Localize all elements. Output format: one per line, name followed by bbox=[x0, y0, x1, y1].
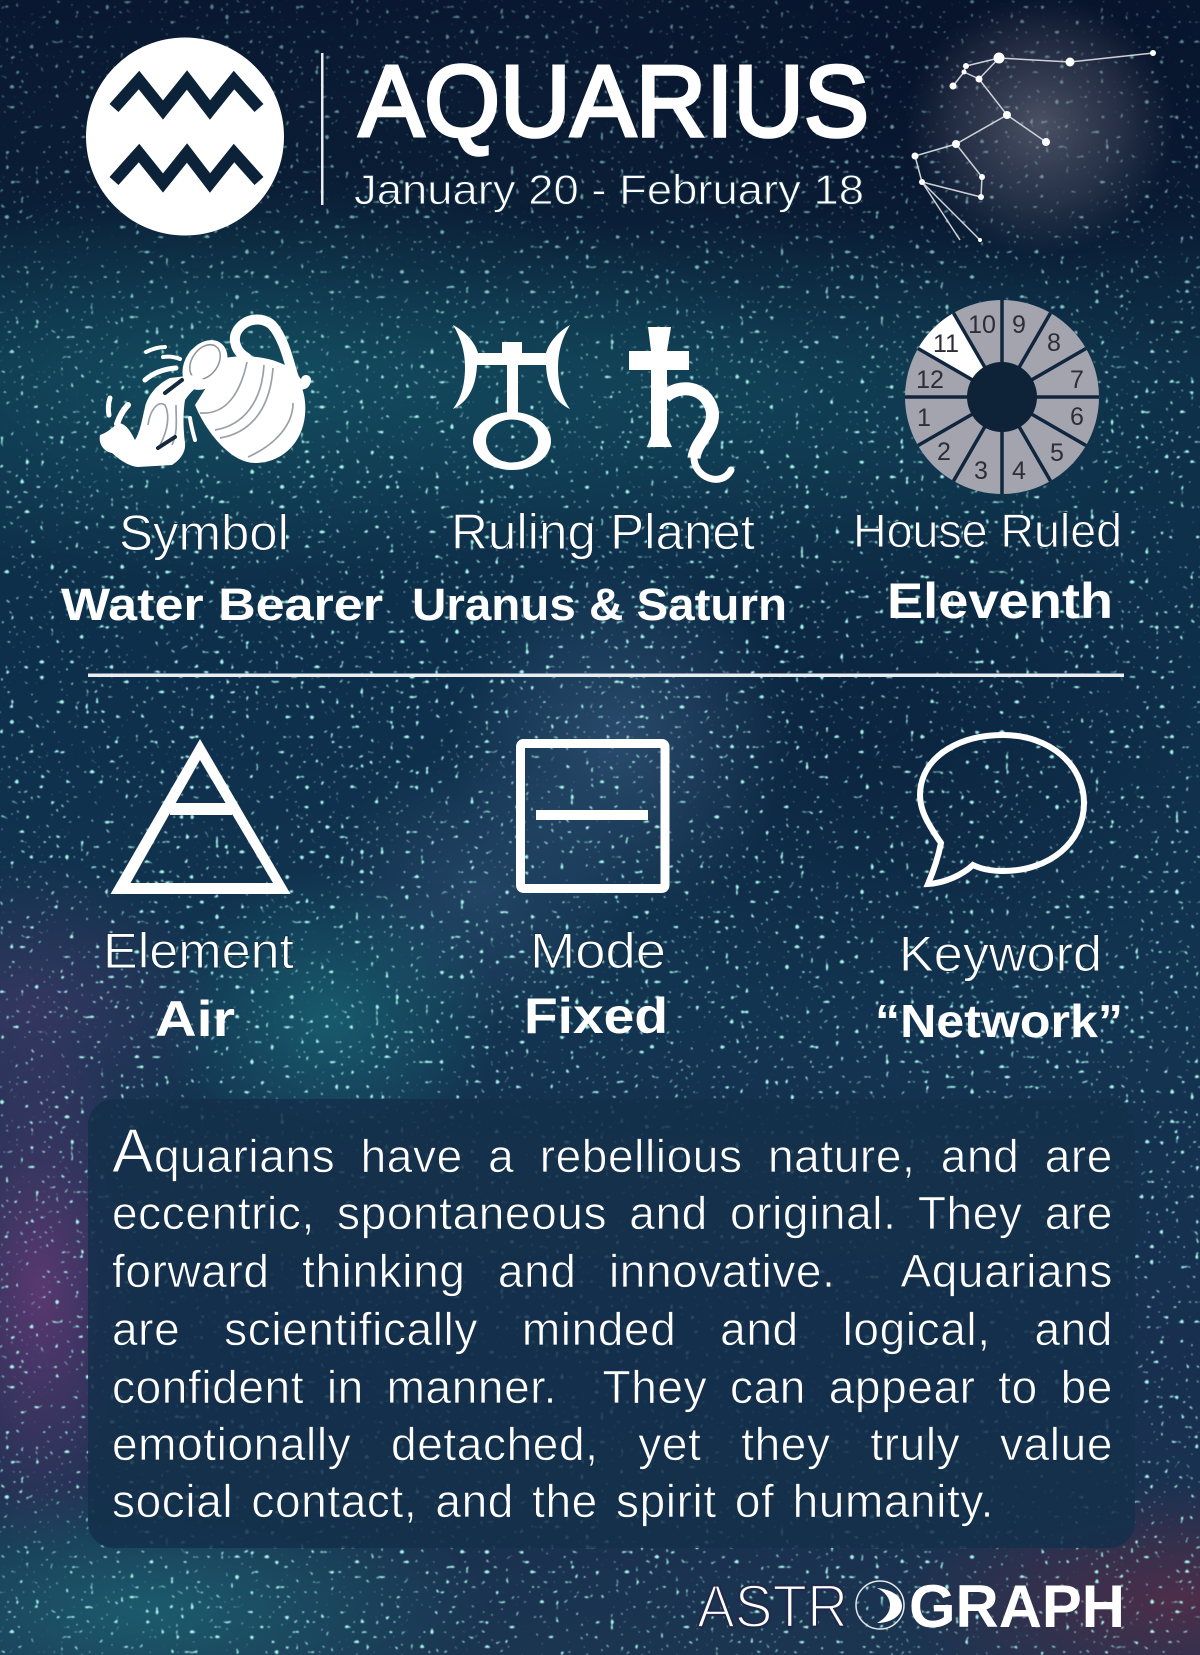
description text: emotionally detached, yet they truly value bbox=[112, 1418, 1113, 1470]
icon: water bearer jug bbox=[100, 319, 306, 467]
label: mode: Mode bbox=[530, 923, 666, 979]
column: element bbox=[103, 739, 294, 1047]
value: eleventh: Eleventh bbox=[887, 573, 1113, 629]
description text: forward thinking and innovative. Aquarians bbox=[112, 1245, 1113, 1297]
icon: house wheel: 12 bbox=[916, 366, 944, 394]
icon: fixed square bbox=[520, 744, 665, 888]
label: element: Element bbox=[103, 923, 294, 979]
column: mode bbox=[520, 744, 668, 1044]
icon: house wheel: 8 bbox=[1047, 329, 1061, 357]
icon: house wheel: 11 bbox=[933, 330, 959, 358]
icon: house wheel: 5 bbox=[1050, 439, 1064, 467]
icon: house wheel: 9 bbox=[1012, 311, 1026, 339]
icon: aquarius constellation bbox=[905, 0, 1175, 255]
description panel background bbox=[88, 1099, 1135, 1548]
description text: are scientifically minded and logical, and bbox=[112, 1303, 1113, 1355]
title: AQUARIUS bbox=[359, 46, 869, 158]
value: uranus and saturn: Uranus & Saturn bbox=[412, 579, 787, 630]
icon: saturn glyph bbox=[629, 327, 731, 479]
value: network: “Network” bbox=[875, 995, 1123, 1047]
logo: astrograph: ASTR bbox=[697, 1573, 848, 1640]
date range: January 20 - February 18 bbox=[354, 166, 864, 213]
divider line bbox=[88, 674, 1124, 677]
icon: aquarius glyph badge bbox=[86, 38, 284, 236]
icon: house wheel: 7 bbox=[1070, 366, 1084, 394]
value: fixed: Fixed bbox=[524, 988, 668, 1044]
icon: air triangle bbox=[110, 739, 290, 894]
column: symbol bbox=[61, 319, 383, 630]
icon: house wheel: 1 bbox=[917, 404, 931, 432]
icon: uranus glyph bbox=[453, 325, 570, 470]
icon: house wheel bbox=[905, 300, 1099, 494]
icon: house wheel: 2 bbox=[937, 438, 951, 466]
icon: house wheel: 6 bbox=[1070, 403, 1084, 431]
icon: house wheel: 3 bbox=[974, 457, 988, 485]
column: keyword bbox=[875, 735, 1123, 1047]
label: keyword: Keyword bbox=[899, 926, 1102, 982]
value: water bearer: Water Bearer bbox=[61, 579, 383, 630]
icon: house wheel: 4 bbox=[1012, 457, 1026, 485]
header bbox=[86, 0, 1175, 255]
logo: astrograph bbox=[697, 1573, 1125, 1640]
description text: social contact, and the spirit of humanity. bbox=[112, 1475, 994, 1527]
value: air: Air bbox=[155, 991, 235, 1047]
description text: confident in manner. They can appear to be bbox=[112, 1361, 1113, 1413]
icon: house wheel: 10 bbox=[968, 311, 996, 339]
label: house ruled: House Ruled bbox=[853, 504, 1122, 557]
header divider bbox=[321, 53, 324, 205]
column: house ruled bbox=[853, 300, 1122, 629]
label: ruling planet: Ruling Planet bbox=[451, 504, 755, 560]
description text: Aquarians have a rebellious nature, and are bbox=[112, 1117, 1113, 1186]
description text: eccentric, spontaneous and original. They are bbox=[112, 1187, 1113, 1239]
label: symbol: Symbol bbox=[119, 505, 289, 561]
column: ruling planet bbox=[412, 325, 787, 630]
icon: speech bubble bbox=[920, 735, 1084, 884]
logo: astrograph: GRAPH bbox=[909, 1573, 1125, 1640]
